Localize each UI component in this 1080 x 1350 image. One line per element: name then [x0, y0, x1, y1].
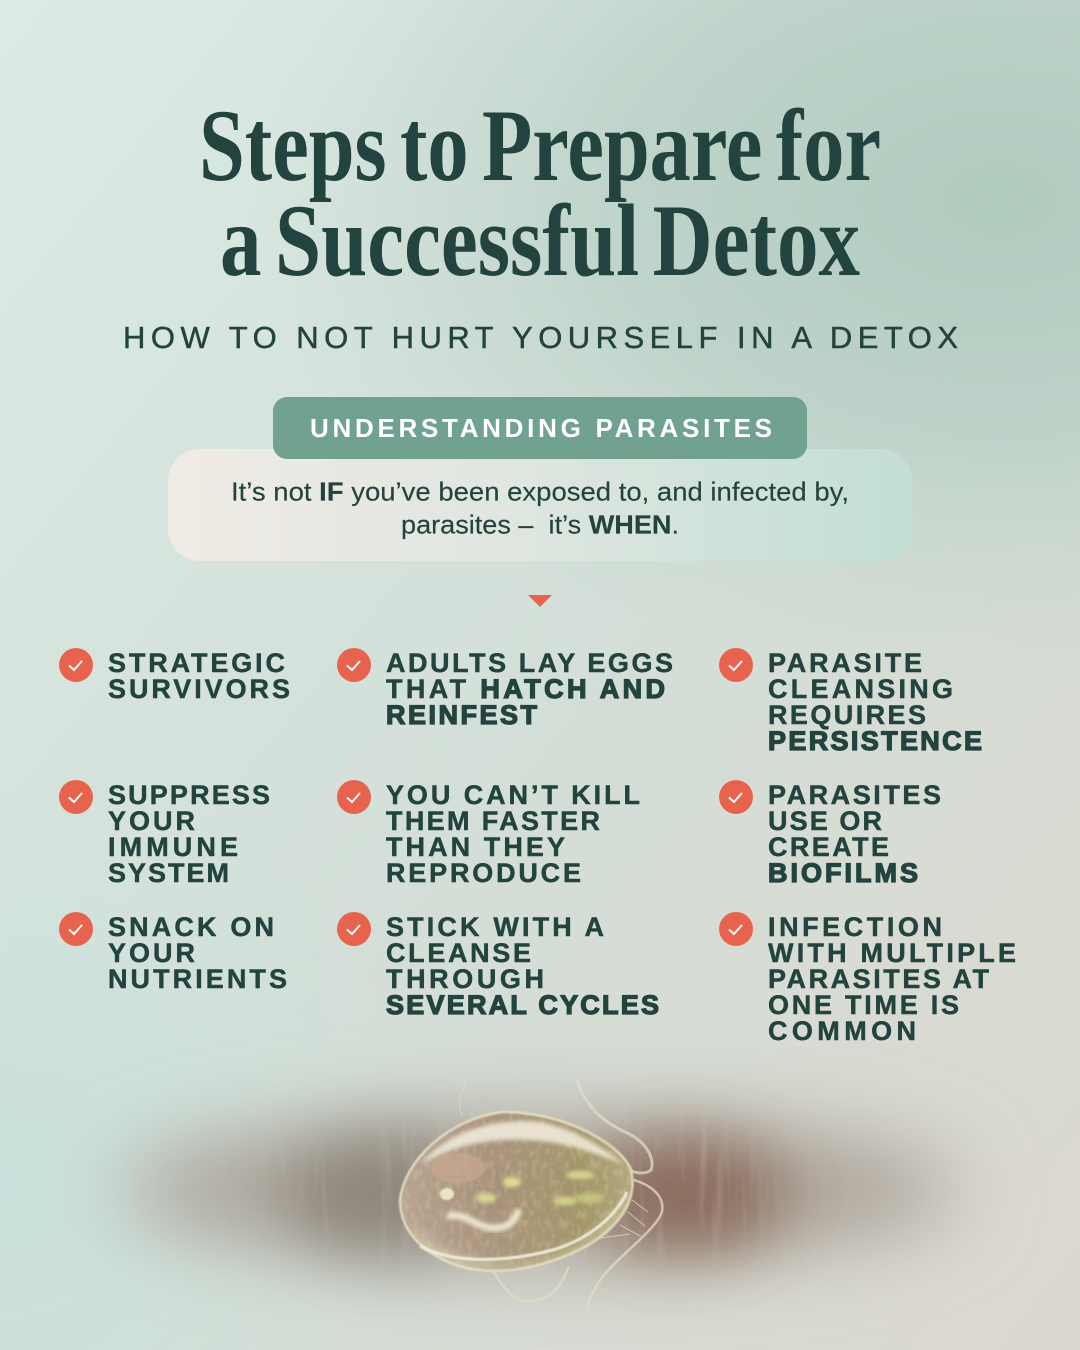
item: parasite cleansing: PERSISTENCE — [768, 726, 982, 756]
item: suppress immune system: SUPPRESS — [108, 780, 270, 810]
arrow — [528, 595, 552, 607]
item: strategic survivors — [59, 648, 290, 704]
item: snack on nutrients: NUTRIENTS — [108, 964, 287, 994]
item: suppress immune system: IMMUNE — [108, 832, 238, 862]
item: snack on nutrients — [59, 912, 287, 994]
item: stick with a cleanse: SEVERAL CYCLES — [386, 990, 659, 1020]
item: multiple parasites: PARASITES AT — [768, 964, 990, 994]
item: strategic survivors: SURVIVORS — [108, 674, 290, 704]
panel: understanding parasites statement: parasites – it’s WHEN. — [401, 510, 679, 540]
item: parasite cleansing — [719, 648, 982, 756]
item: biofilms — [719, 780, 941, 888]
item: biofilms: PARASITES — [768, 780, 941, 810]
item: parasite cleansing: REQUIRES — [768, 700, 926, 730]
item: parasite cleansing: CLEANSING — [768, 674, 953, 704]
item: biofilms: USE OR — [768, 806, 882, 836]
subtitle: HOW TO NOT HURT YOURSELF IN A DETOX — [123, 320, 958, 355]
item: adults lay eggs: THAT HATCH AND — [386, 674, 665, 704]
item: biofilms: CREATE — [768, 832, 889, 862]
item: snack on nutrients: YOUR — [108, 938, 195, 968]
item: suppress immune system: SYSTEM — [108, 858, 229, 888]
item: multiple parasites: ONE TIME IS — [768, 990, 959, 1020]
item: multiple parasites: INFECTION — [768, 912, 942, 942]
item: stick with a cleanse: CLEANSE — [386, 938, 531, 968]
title: Steps to Prepare for — [199, 89, 881, 203]
item: multiple parasites: WITH MULTIPLE — [768, 938, 1016, 968]
title — [199, 89, 881, 298]
item: can't kill them faster: THEM FASTER — [386, 806, 600, 836]
item: snack on nutrients: SNACK ON — [108, 912, 274, 942]
item: stick with a cleanse — [337, 912, 659, 1020]
parasite illustration — [120, 1060, 960, 1320]
title: a Successful Detox — [220, 184, 860, 298]
panel: understanding parasites statement: It’s not IF you’ve been exposed to, and infected by, — [231, 476, 849, 506]
item: strategic survivors: STRATEGIC — [108, 648, 285, 678]
item: can't kill them faster: THAN THEY — [386, 832, 565, 862]
item: can't kill them faster: YOU CAN’T KILL — [386, 780, 640, 810]
item: suppress immune system — [59, 780, 270, 888]
item: adults lay eggs: ADULTS LAY EGGS — [386, 648, 673, 678]
heading badge — [273, 397, 807, 459]
item: parasite cleansing: PARASITE — [768, 648, 922, 678]
item: biofilms: BIOFILMS — [768, 858, 918, 888]
item: can't kill them faster — [337, 780, 640, 888]
heading badge: UNDERSTANDING PARASITES — [310, 413, 772, 443]
panel: understanding parasites statement — [168, 449, 912, 561]
item: stick with a cleanse: STICK WITH A — [386, 912, 604, 942]
item: adults lay eggs: REINFEST — [386, 700, 538, 730]
item: can't kill them faster: REPRODUCE — [386, 858, 581, 888]
item: multiple parasites: COMMON — [768, 1016, 916, 1046]
item: suppress immune system: YOUR — [108, 806, 195, 836]
item: stick with a cleanse: THROUGH — [386, 964, 544, 994]
item: multiple parasites — [719, 912, 1016, 1046]
item: adults lay eggs — [337, 648, 673, 730]
